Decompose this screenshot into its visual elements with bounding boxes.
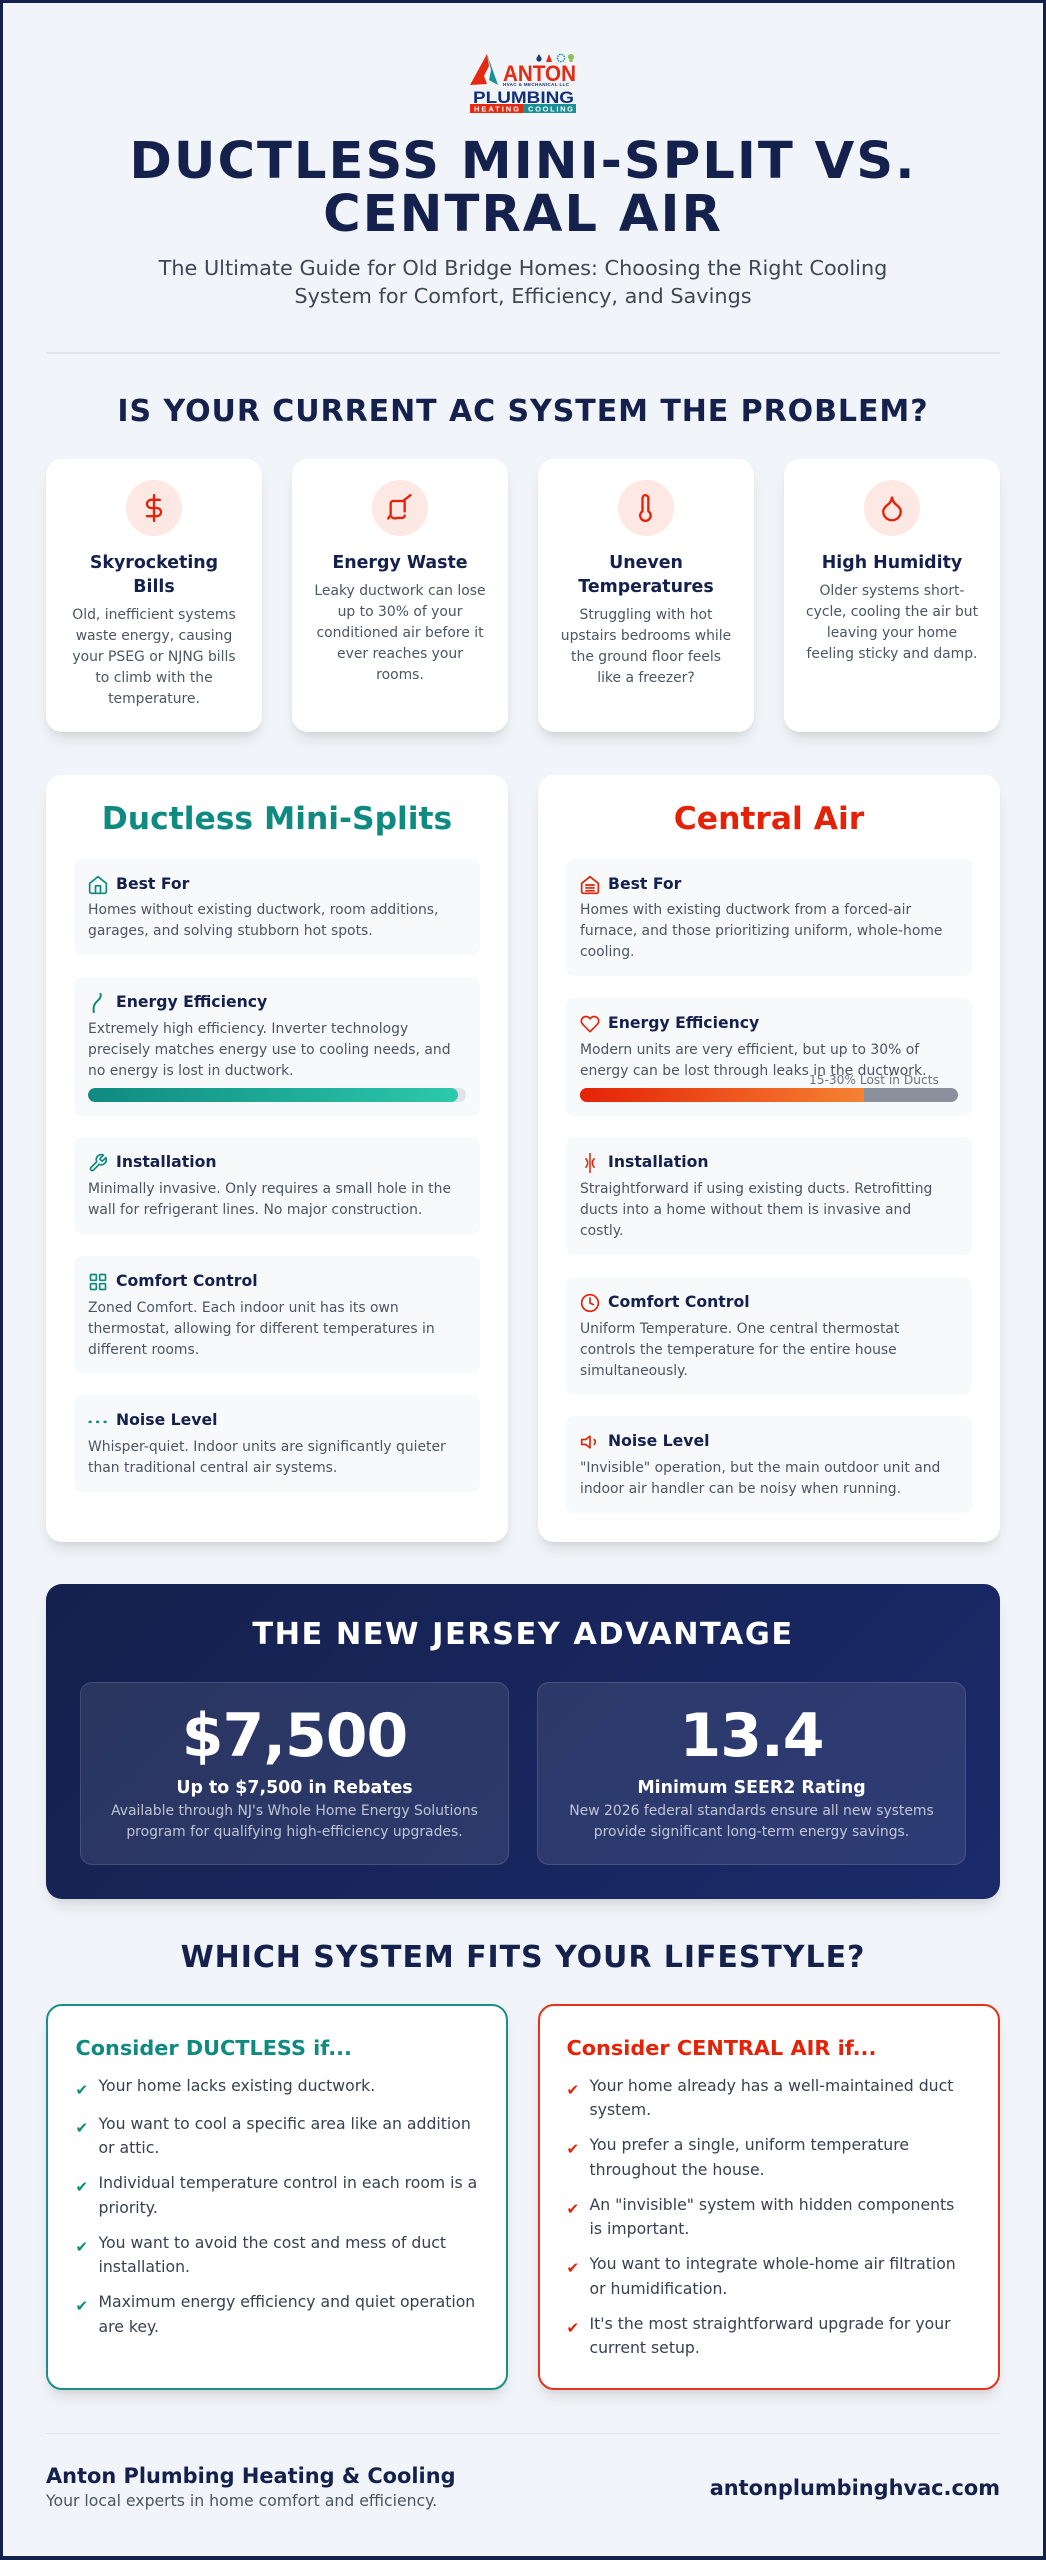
- heading: which system fits your lifestyle: WHICH SYSTEM FITS YOUR LIFESTYLE?: [181, 1940, 865, 1975]
- checklist: Maximum energy efficiency and quiet operation: [98, 2292, 475, 2311]
- item: noise level: than traditional central air systems.: [88, 1460, 337, 1476]
- checklist: or attic.: [98, 2138, 159, 2157]
- item: noise level: [74, 1395, 480, 1492]
- item: installation: Installation: [608, 1152, 708, 1171]
- stat description: [569, 1803, 934, 1840]
- checklist: You want to cool a specific area like an addition: [98, 2114, 471, 2133]
- heading: is your current AC system the problem: IS YOUR CURRENT AC SYSTEM THE PROBLEM?: [117, 394, 929, 429]
- stat description: Available through NJ's Whole Home Energy Solutions: [111, 1803, 478, 1819]
- card text: leaving your home: [827, 625, 957, 641]
- stat number: $7,500: [182, 1701, 407, 1771]
- icon: thermometer: [618, 480, 674, 536]
- item: comfort control: Comfort Control: [608, 1292, 750, 1311]
- card text: [806, 583, 978, 662]
- stat description: New 2026 federal standards ensure all new systems: [569, 1803, 934, 1819]
- item: comfort control: [74, 1256, 480, 1373]
- card text: [72, 607, 236, 707]
- checklist: system.: [590, 2100, 651, 2119]
- title: CENTRAL AIR: [323, 184, 723, 244]
- item: installation: Installation: [116, 1152, 216, 1171]
- footer: website: antonplumbinghvac.com: [710, 2476, 1000, 2500]
- item: comfort control: controls the temperature for the entire house: [580, 1342, 897, 1358]
- checklist: [76, 2076, 477, 2336]
- card heading: Skyrocketing: [90, 552, 218, 572]
- panel heading: Consider DUCTLESS if...: [76, 2036, 352, 2060]
- stat card: SEER2: [537, 1682, 966, 1865]
- card text: Old, inefficient systems: [72, 607, 236, 623]
- item: best for: Homes without existing ductwork, room additions,: [88, 902, 438, 918]
- logo: Anton Plumbing Heating Cooling: HVAC & MECHANICAL LLC: [503, 82, 570, 87]
- card text: Older systems short-: [819, 583, 965, 599]
- logo: Anton Plumbing Heating Cooling: ANTON: [503, 61, 576, 86]
- stat label: Up to $7,500 in Rebates: [176, 1778, 413, 1798]
- footer: company name: Anton Plumbing Heating & Cooling: [46, 2464, 456, 2488]
- stat description: [111, 1803, 478, 1840]
- icon: leaky duct: [372, 480, 428, 536]
- card text: temperature.: [108, 691, 200, 707]
- checklist: ✔: [566, 2319, 579, 2337]
- card text: your PSEG or NJNG bills: [72, 649, 236, 665]
- item: energy efficiency: Modern units are very efficient, but up to 30% of: [580, 1042, 919, 1058]
- item: noise level: Noise Level: [608, 1431, 710, 1450]
- card text: upstairs bedrooms while: [561, 628, 731, 644]
- checklist: Individual temperature control in each room is a: [98, 2173, 477, 2192]
- item: comfort control: Comfort Control: [116, 1271, 258, 1290]
- checklist: An "invisible" system with hidden components: [590, 2195, 954, 2214]
- card text: waste energy, causing: [76, 628, 232, 644]
- checklist: or humidification.: [590, 2278, 727, 2298]
- card text: to climb with the: [95, 670, 213, 686]
- checklist: ✔: [76, 2119, 88, 2137]
- item: energy efficiency: [566, 998, 972, 1116]
- item: installation: wall for refrigerant lines. No major construction.: [88, 1202, 422, 1218]
- checklist: It's the most straightforward upgrade for your: [590, 2314, 951, 2333]
- checklist: ✔: [76, 2081, 88, 2099]
- checklist: [566, 2076, 956, 2357]
- card text: [561, 607, 731, 686]
- checklist: ✔: [566, 2200, 579, 2218]
- card text: rooms.: [376, 667, 424, 683]
- item: energy efficiency: Energy Efficiency: [608, 1013, 759, 1032]
- card heading: High Humidity: [822, 552, 962, 572]
- stat label: Minimum SEER2 Rating: [637, 1778, 866, 1798]
- logo: Anton Plumbing Heating Cooling: HEATING: [474, 104, 519, 114]
- checklist: You prefer a single, uniform temperature: [590, 2135, 909, 2154]
- item: noise level: [566, 1416, 972, 1513]
- heading: the New Jersey advantage: THE NEW JERSEY ADVANTAGE: [252, 1617, 794, 1652]
- card text: Struggling with hot: [580, 607, 712, 623]
- card text: cycle, cooling the air but: [806, 604, 978, 620]
- stat description: program for qualifying high-efficiency upgrades.: [126, 1824, 463, 1840]
- card text: Leaky ductwork can lose: [314, 583, 486, 599]
- item: energy efficiency: Extremely high efficiency. Inverter technology: [88, 1020, 408, 1036]
- item: comfort control: thermostat, allowing for different temperatures in: [88, 1320, 435, 1336]
- title: [129, 131, 917, 244]
- card heading: Energy Waste: [332, 552, 468, 572]
- panel: consider central air: [538, 2004, 1000, 2390]
- item: noise level: Whisper-quiet. Indoor units are significantly quieter: [88, 1438, 446, 1454]
- item: energy efficiency: energy can be lost through leaks in the ductwork.: [580, 1062, 926, 1078]
- panel heading: Consider CENTRAL AIR if...: [566, 2036, 876, 2060]
- stat number: 13.4: [679, 1701, 824, 1771]
- item: installation: costly.: [580, 1222, 623, 1238]
- checklist: are key.: [98, 2317, 159, 2336]
- item: comfort control: Zoned Comfort. Each indoor unit has its own: [88, 1300, 399, 1316]
- item: best for: Best For: [608, 874, 681, 893]
- item: energy efficiency: precisely matches energy use to cooling needs, and: [88, 1042, 451, 1058]
- card heading: [90, 552, 218, 596]
- item: installation: ducts into a home without them is invasive and: [580, 1202, 911, 1218]
- footer: tagline: Your local experts in home comfort and efficiency.: [46, 2491, 437, 2510]
- panel: uneven temperatures: [538, 459, 754, 732]
- panel heading: Central Air: [674, 801, 864, 837]
- checklist: current setup.: [590, 2338, 700, 2357]
- item: noise level: "Invisible" operation, but the main outdoor unit and: [580, 1460, 940, 1476]
- item: energy efficiency: Energy Efficiency: [116, 992, 267, 1011]
- progress bar: 75% with duct loss: [580, 1088, 958, 1102]
- checklist: installation.: [98, 2257, 190, 2276]
- checklist: ✔: [76, 2297, 88, 2315]
- subtitle: The Ultimate Guide for Old Bridge Homes: Choosing the Right Cooling: [159, 256, 887, 280]
- card text: ever reaches your: [337, 646, 463, 662]
- card heading: Temperatures: [578, 576, 714, 596]
- subtitle: [158, 256, 887, 308]
- card text: feeling sticky and damp.: [807, 646, 977, 662]
- checklist: You want to avoid the cost and mess of duct: [98, 2233, 446, 2252]
- item: best for: cooling.: [580, 944, 634, 960]
- checklist: Your home lacks existing ductwork.: [98, 2076, 375, 2095]
- item: comfort control: [566, 1277, 972, 1395]
- checklist: Your home already has a well-maintained duct: [590, 2076, 953, 2095]
- subtitle: System for Comfort, Efficiency, and Savings: [294, 284, 752, 308]
- panel: high humidity: [784, 459, 1000, 732]
- checklist: priority.: [98, 2198, 158, 2217]
- panel: skyrocketing bills: [46, 459, 262, 732]
- icon: droplet: [864, 480, 920, 536]
- item: noise level: indoor air handler can be noisy when running.: [580, 1480, 901, 1496]
- checklist: You want to integrate whole-home air filtration: [590, 2254, 956, 2273]
- checklist: ✔: [566, 2259, 579, 2277]
- checklist: ✔: [76, 2238, 88, 2256]
- item: best for: furnace, and those prioritizing uniform, whole-home: [580, 923, 942, 939]
- card text: like a freezer?: [597, 670, 695, 686]
- card text: [314, 583, 486, 683]
- item: best for: [74, 859, 480, 955]
- item: installation: Straightforward if using existing ducts. Retrofitting: [580, 1180, 932, 1196]
- item: installation: [566, 1137, 972, 1255]
- card heading: Bills: [133, 576, 175, 596]
- item: comfort control: Uniform Temperature. One central thermostat: [580, 1320, 899, 1336]
- card heading: Uneven: [609, 552, 683, 572]
- checklist: is important.: [590, 2219, 689, 2238]
- item: best for: garages, and solving stubborn hot spots.: [88, 923, 373, 939]
- card heading: [578, 552, 714, 596]
- item: noise level: Noise Level: [116, 1410, 218, 1429]
- panel heading: Ductless Mini-Splits: [102, 801, 452, 837]
- card text: the ground floor feels: [571, 649, 721, 665]
- item: comfort control: different rooms.: [88, 1342, 199, 1358]
- item: installation: [74, 1137, 480, 1234]
- item: best for: Best For: [116, 874, 189, 893]
- panel: ductless mini-splits: [46, 775, 508, 1542]
- item: installation: Minimally invasive. Only requires a small hole in the: [88, 1180, 451, 1196]
- logo: Anton Plumbing Heating Cooling: PLUMBING: [473, 88, 574, 107]
- panel: consider ductless: [46, 2004, 508, 2390]
- panel: the New Jersey advantage: [46, 1584, 1000, 1899]
- stat description: provide significant long-term energy savings.: [594, 1824, 909, 1840]
- checklist: throughout the house.: [590, 2160, 765, 2178]
- bar label: 15-30% Lost in Ducts: [809, 1073, 939, 1087]
- title: DUCTLESS MINI-SPLIT VS.: [129, 131, 917, 191]
- card text: conditioned air before it: [316, 625, 484, 641]
- progress bar: 98%: [88, 1088, 466, 1102]
- item: best for: Homes with existing ductwork from a forced-air: [580, 902, 911, 918]
- card text: up to 30% of your: [338, 604, 462, 620]
- panel: energy waste: [292, 459, 508, 732]
- panel: central air: [538, 775, 1000, 1542]
- icon: dollar: [126, 480, 182, 536]
- checklist: ✔: [76, 2178, 88, 2196]
- item: comfort control: simultaneously.: [580, 1362, 688, 1378]
- checklist: ✔: [566, 2081, 579, 2099]
- item: best for: [566, 859, 972, 976]
- item: energy efficiency: [74, 977, 480, 1116]
- checklist: ✔: [566, 2140, 579, 2158]
- item: energy efficiency: no energy is lost in ductwork.: [88, 1062, 294, 1078]
- stat card: rebates: [80, 1682, 509, 1865]
- logo: Anton Plumbing Heating Cooling: [470, 54, 576, 114]
- logo: Anton Plumbing Heating Cooling: COOLING: [528, 104, 573, 114]
